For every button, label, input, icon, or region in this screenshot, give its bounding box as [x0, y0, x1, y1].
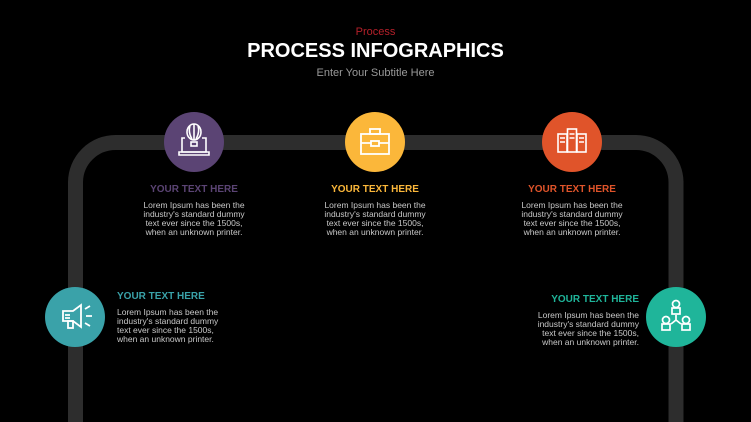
icon: cabinets (orange): [542, 112, 602, 172]
body orange: industry's standard dummy: [521, 209, 623, 219]
body orange: when an unknown printer.: [524, 227, 620, 237]
body orange: Lorem Ipsum has been the: [521, 200, 623, 210]
body teal: industry's standard dummy: [117, 316, 218, 326]
body purple: industry's standard dummy: [143, 209, 245, 219]
body yellow: when an unknown printer.: [327, 227, 423, 237]
heading purple: YOUR TEXT HERE: [150, 184, 238, 195]
body teal: Lorem Ipsum has been the: [117, 307, 218, 317]
body green: when an unknown printer.: [542, 337, 639, 347]
body teal: when an unknown printer.: [117, 334, 214, 344]
text block: yellow: [324, 184, 426, 237]
text block: teal: [117, 291, 218, 344]
heading yellow: YOUR TEXT HERE: [331, 184, 419, 195]
heading teal: YOUR TEXT HERE: [117, 291, 205, 302]
body green: Lorem Ipsum has been the: [538, 310, 639, 320]
body green: text ever since the 1500s,: [542, 328, 639, 338]
body orange: [521, 200, 623, 237]
text block: purple: [143, 184, 245, 237]
title: PROCESS INFOGRAPHICS: [247, 40, 504, 62]
body yellow: Lorem Ipsum has been the: [324, 200, 426, 210]
text block: green: [538, 294, 639, 347]
body orange: text ever since the 1500s,: [524, 218, 620, 228]
icon: network people (green): [646, 287, 706, 347]
icon: briefcase (yellow): [345, 112, 405, 172]
body yellow: text ever since the 1500s,: [327, 218, 423, 228]
body yellow: [324, 200, 426, 237]
icon: balloon laptop (purple): [164, 112, 224, 172]
body purple: when an unknown printer.: [146, 227, 242, 237]
text block: orange: [521, 184, 623, 237]
body purple: text ever since the 1500s,: [146, 218, 242, 228]
body teal: text ever since the 1500s,: [117, 325, 214, 335]
body green: [538, 310, 639, 347]
heading green: YOUR TEXT HERE: [551, 294, 639, 305]
body yellow: industry's standard dummy: [324, 209, 426, 219]
body purple: Lorem Ipsum has been the: [143, 200, 245, 210]
body teal: [117, 307, 218, 344]
label: process: Process: [356, 26, 395, 38]
body purple: [143, 200, 245, 237]
body green: industry's standard dummy: [538, 319, 639, 329]
heading orange: YOUR TEXT HERE: [528, 184, 616, 195]
subtitle: Enter Your Subtitle Here: [316, 67, 435, 79]
icon: megaphone (teal): [45, 287, 105, 347]
